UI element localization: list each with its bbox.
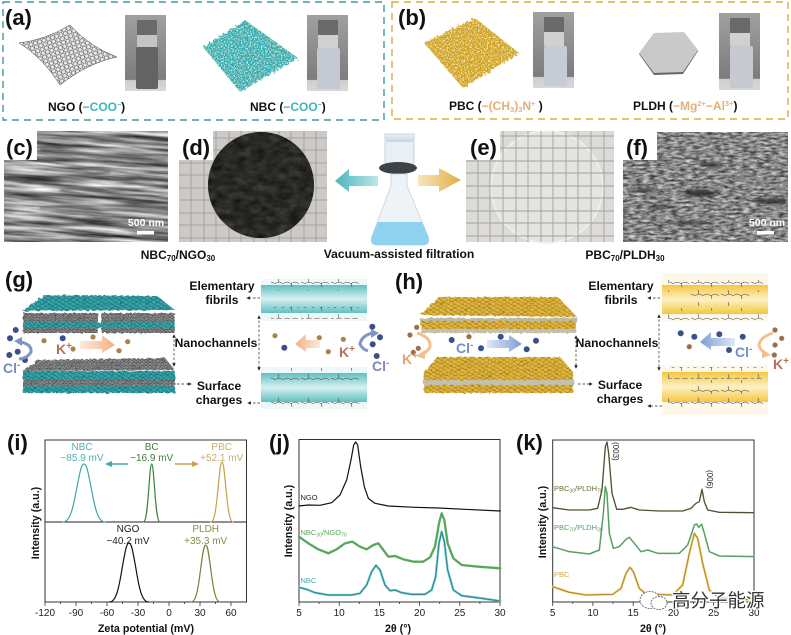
- label PBC70/PLDH30: 30: [597, 528, 603, 534]
- label Surface charges: [597, 378, 643, 406]
- ions: left channel potassium: [41, 334, 130, 353]
- caption PBC70/PLDH30: 30: [656, 254, 665, 263]
- x tick labels: 10: [587, 608, 599, 619]
- caption NGO: ): [121, 100, 125, 114]
- caption NBC: NBC (−COO: [250, 100, 318, 114]
- arrow: towards e: [418, 168, 461, 192]
- x tick labels: -30: [131, 608, 146, 619]
- caption NBC70/NGO30: /NGO: [176, 248, 206, 262]
- caption PBC: ): [535, 99, 543, 113]
- curve PLDH: [191, 545, 220, 602]
- photo: PLDH vial: [719, 13, 760, 90]
- arrow: Cl- transport: [487, 335, 522, 352]
- label (a): (a): [5, 5, 32, 30]
- text K+: K: [402, 351, 412, 367]
- x axis title: 2θ (°): [640, 623, 666, 635]
- label NBC: NBC: [300, 576, 317, 585]
- label NBC30/NGO70: /NGO: [322, 528, 341, 537]
- arrow: BC to PBC: [175, 461, 199, 467]
- arrow: Cl- transport right: [700, 332, 735, 350]
- caption NGO: −: [117, 102, 121, 109]
- icon: NGO graphene sheet: [19, 25, 117, 85]
- label (j): (j): [269, 430, 290, 455]
- label (i): (i): [7, 430, 28, 455]
- label Elementary fibrils: fibrils: [206, 293, 239, 307]
- x tick labels: 5: [550, 608, 556, 619]
- x axis title: 2θ (°): [385, 623, 411, 635]
- x tick labels: [550, 608, 760, 619]
- label PBC30/PLDH70: 30: [569, 488, 575, 494]
- label PBC value: [200, 442, 244, 464]
- chart j: XRD patterns: [269, 430, 506, 635]
- icon: lower NBC/NGO stack: [22, 358, 175, 393]
- label Surface charges: charges: [196, 393, 242, 407]
- x tick labels: 25: [454, 608, 466, 619]
- icon: vacuum filtration flask: [371, 134, 429, 245]
- caption NBC70/NGO30: 70: [167, 254, 176, 263]
- x tick labels: -120: [35, 608, 55, 619]
- label PBC30/PLDH70: 70: [597, 488, 603, 494]
- x tick labels: 20: [668, 608, 679, 619]
- diagram: upper fibril band: [261, 279, 367, 321]
- icon: upper NBC/NGO stack: [22, 295, 175, 333]
- photo: NGO vial: [125, 15, 166, 91]
- ions: right channel potassium: [272, 333, 346, 354]
- label PBC70/PLDH30: /PLDH: [575, 523, 597, 532]
- x tick labels: [35, 608, 237, 619]
- panel b: positively charged building blocks: [392, 2, 788, 119]
- panel f: SEM image PBC/PLDH: [623, 131, 788, 242]
- label NGO value: [106, 524, 150, 547]
- label (b): (b): [398, 5, 426, 30]
- label Elementary fibrils: [588, 279, 654, 307]
- icon: upper PBC/PLDH stack: [420, 297, 577, 333]
- caption NBC: ): [322, 100, 326, 114]
- panel c: SEM image NBC/NGO: [4, 131, 168, 242]
- text Cl- right: Cl: [372, 358, 386, 374]
- text K+: +: [412, 351, 418, 362]
- label (003): (003): [611, 442, 620, 461]
- label Elementary fibrils: fibrils: [605, 293, 638, 307]
- label PBC70/PLDH30: 70: [569, 528, 575, 534]
- text K+ right: K: [773, 356, 783, 372]
- caption PBC: +: [531, 99, 536, 108]
- ions: left channel chloride: [6, 327, 66, 363]
- text K+ right: +: [349, 344, 355, 355]
- arrow: K+ transport right: [295, 334, 320, 352]
- label (k): (k): [516, 430, 543, 455]
- label NBC30/NGO70: 70: [341, 532, 347, 538]
- label (c): (c): [6, 135, 33, 160]
- x tick labels: -60: [100, 608, 115, 619]
- label Surface charges: [196, 379, 242, 407]
- curve PBC70/PLDH30: [553, 487, 754, 557]
- icon: lower PBC/PLDH stack: [423, 357, 574, 393]
- x tick labels: 30: [748, 608, 760, 619]
- arrow: K+ transport: [80, 335, 115, 353]
- curve NBC30/NGO70: [299, 513, 500, 568]
- label (006): (006): [705, 470, 714, 489]
- ions: left channel potassium: [407, 325, 472, 355]
- curve NGO: [110, 543, 148, 602]
- photo: PBC vial: [533, 12, 574, 88]
- text Cl- right: Cl: [735, 344, 749, 360]
- caption PBC70/PLDH30: /PLDH: [620, 248, 656, 262]
- curve BC: [143, 464, 160, 522]
- frame and ticks: [299, 440, 500, 606]
- label PBC30/PLDH70: PBC: [554, 484, 569, 493]
- photo: NBC vial: [307, 15, 348, 91]
- label BC value: BC: [145, 442, 159, 453]
- x axis title: Zeta potential (mV): [98, 623, 195, 635]
- diagram: upper gold fibril band: [662, 273, 768, 321]
- x tick labels: 15: [374, 608, 385, 619]
- icon: PBC fibre mesh: [424, 18, 519, 88]
- text Cl-: -: [17, 360, 20, 371]
- label NGO: NGO: [300, 493, 318, 502]
- x tick labels: 5: [296, 608, 302, 619]
- diagram: lower fibril band: [261, 367, 367, 409]
- curve PBC: [553, 533, 754, 600]
- x tick labels: 30: [194, 608, 206, 619]
- caption PLDH: ): [733, 99, 737, 113]
- x tick labels: 30: [494, 608, 506, 619]
- x tick labels: -90: [69, 608, 84, 619]
- caption NGO: NGO (−COO: [48, 100, 117, 114]
- label NBC value: NBC: [71, 442, 93, 453]
- y axis title: Intensity (a.u.): [537, 485, 549, 558]
- label PBC value: PBC: [211, 442, 232, 453]
- label BC value: −16.9 mV: [130, 453, 174, 464]
- panel a: negatively charged building blocks: [3, 2, 384, 120]
- y axis title: Intensity (a.u.): [283, 484, 295, 557]
- label (h): (h): [395, 269, 423, 294]
- icon: NBC fibre mesh: [203, 20, 298, 92]
- arrow: towards d: [335, 169, 378, 192]
- label NGO value: −40.2 mV: [106, 536, 150, 547]
- frame and ticks: [553, 440, 754, 606]
- caption PLDH: 3+: [725, 99, 734, 108]
- text Cl- right: -: [386, 358, 389, 369]
- caption PLDH: −Al: [706, 99, 725, 113]
- label PBC70/PLDH30: PBC: [554, 523, 569, 532]
- arrows: dashed pointers: [174, 298, 260, 403]
- label NBC value: −85.9 mV: [60, 453, 104, 464]
- diagram: lower gold fibril band: [662, 365, 768, 415]
- label PBC value: +52.1 mV: [200, 453, 244, 464]
- label Surface charges: Surface: [598, 378, 642, 392]
- caption NBC70/NGO30: NBC: [141, 248, 167, 262]
- x tick labels: 20: [414, 608, 426, 619]
- arrow: K+ rejected: [416, 333, 430, 359]
- label BC value: [130, 442, 174, 464]
- ions: right channel chloride: [281, 324, 383, 359]
- scale bar c: 500 nm: [128, 217, 164, 229]
- x tick labels: 15: [628, 608, 639, 619]
- label NBC30/NGO70: 30: [316, 532, 322, 538]
- watermark: WeChat icon and name: 高分子能源: [672, 587, 765, 613]
- label PLDH value: PLDH: [192, 524, 219, 535]
- x tick labels: 25: [708, 608, 720, 619]
- x tick labels: [296, 608, 506, 619]
- caption PLDH: 2+: [697, 99, 707, 108]
- panel e: PBC/PLDH film photo: [466, 131, 614, 243]
- label (g): (g): [5, 267, 33, 292]
- label PLDH value: +35.3 mV: [184, 536, 228, 547]
- curve NBC: [63, 464, 105, 522]
- text Cl-: Cl: [456, 340, 470, 356]
- label PBC: PBC: [554, 570, 570, 579]
- label Nanochannels: Nanochannels: [175, 336, 258, 350]
- caption PBC: 3: [518, 105, 522, 114]
- label Elementary fibrils: Elementary: [189, 279, 255, 293]
- panel d: NBC/NGO film photo: [179, 130, 327, 242]
- caption PBC70/PLDH30: 70: [611, 254, 620, 263]
- icon: PLDH hexagon: [639, 32, 698, 75]
- label Elementary fibrils: Elementary: [588, 279, 654, 293]
- label (d): (d): [182, 135, 210, 160]
- label Elementary fibrils: [189, 279, 255, 307]
- curve PBC30/PLDH70: [553, 442, 754, 513]
- label PBC30/PLDH70: /PLDH: [575, 484, 597, 493]
- chart k: XRD patterns: [516, 430, 760, 635]
- ions: right channel potassium: [687, 327, 784, 358]
- caption PLDH: PLDH (−Mg: [633, 99, 697, 113]
- scale bar f: [749, 217, 785, 234]
- text K+ right: K: [339, 344, 349, 360]
- text Cl- right: -: [749, 344, 752, 355]
- arrow: Cl- rejected right: [360, 329, 379, 351]
- x tick labels: 0: [166, 608, 172, 619]
- text K+: +: [66, 341, 72, 352]
- curve NBC: [299, 532, 500, 601]
- caption PBC: ): [514, 99, 518, 113]
- caption PBC: N: [522, 99, 531, 113]
- text Cl-: -: [470, 340, 473, 351]
- caption PBC: PBC (−(CH: [449, 99, 510, 113]
- caption vacuum-assisted filtration: Vacuum-assisted filtration: [324, 247, 474, 261]
- label NGO value: NGO: [117, 524, 140, 535]
- caption NBC: −: [318, 102, 322, 109]
- curves j: [299, 442, 500, 601]
- label Surface charges: Surface: [197, 379, 241, 393]
- arrows: dashed pointers: [576, 298, 662, 406]
- frame and ticks: [45, 440, 246, 606]
- caption NBC70/NGO30: 30: [206, 254, 216, 263]
- label Nanochannels: Nanochannels: [576, 336, 659, 350]
- label (f): (f): [626, 135, 648, 160]
- curve PBC: [211, 462, 233, 522]
- arrow: K+ rejected right: [759, 333, 773, 358]
- y axis title: Intensity (a.u.): [30, 486, 42, 559]
- label Surface charges: charges: [597, 392, 643, 406]
- panel h: PBC/PLDH nanochannel schematic: [395, 269, 789, 415]
- caption PBC70/PLDH30: PBC: [585, 248, 611, 262]
- arrow: Cl- rejected: [14, 337, 31, 359]
- ions: right channel chloride: [678, 330, 746, 353]
- text Cl-: Cl: [3, 360, 17, 376]
- arrow: BC to NBC: [105, 461, 128, 467]
- caption PBC: 3: [510, 105, 514, 114]
- chart i: zeta potential: [7, 430, 246, 635]
- ions: left channel chloride: [449, 334, 539, 352]
- x tick labels: 10: [334, 608, 345, 619]
- text K+: K: [56, 341, 66, 357]
- label (e): (e): [470, 135, 497, 160]
- scale bar f: 500 nm: [749, 217, 785, 229]
- x tick labels: 60: [225, 608, 237, 619]
- curves k: [553, 442, 754, 600]
- label NBC30/NGO70: NBC: [300, 528, 316, 537]
- label PLDH value: [184, 524, 228, 547]
- scale bar c: [128, 217, 164, 234]
- label NBC value: [60, 442, 104, 464]
- text K+ right: +: [783, 356, 789, 367]
- panel g: NBC/NGO nanochannel schematic: [3, 267, 389, 409]
- curve NGO: [299, 442, 500, 511]
